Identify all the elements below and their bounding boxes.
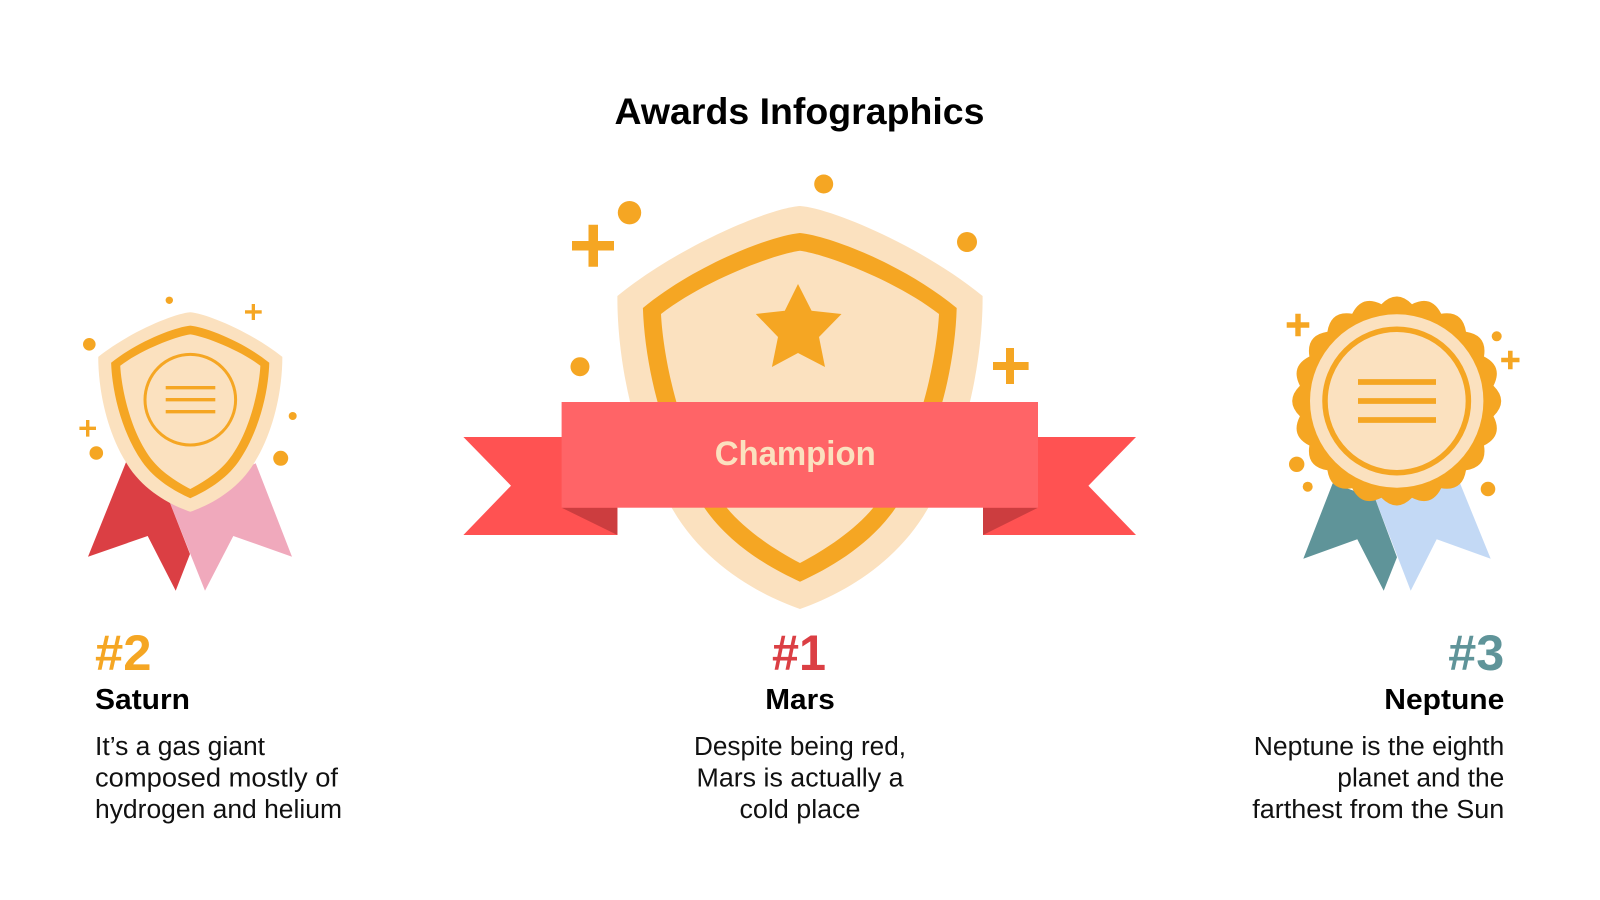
panel: saturn medal: [79, 297, 297, 591]
shield border: [643, 233, 957, 582]
text block: mars: [694, 625, 906, 824]
emblem lines: [166, 388, 215, 412]
description: [95, 733, 342, 824]
text block: saturn: [95, 625, 342, 824]
sparkles: [1287, 314, 1520, 496]
description: hydrogen and helium: [95, 796, 342, 824]
description: It’s a gas giant: [95, 733, 265, 761]
ribbon: light blue: [1375, 483, 1491, 591]
description: Despite being red,: [694, 733, 906, 761]
sparkles: [79, 297, 297, 466]
title: Awards Infographics: [614, 91, 984, 132]
banner centre: [562, 402, 1038, 508]
name: Saturn: [95, 684, 190, 716]
text block: neptune: [1252, 625, 1504, 824]
banner label: Champion: [715, 435, 876, 473]
rosette scalloped edge: [1292, 296, 1501, 506]
banner right fold: [983, 508, 1038, 535]
banner left tail: [463, 437, 617, 535]
description: composed mostly of: [95, 765, 339, 793]
description: Mars is actually a: [696, 765, 904, 793]
icon: star: [756, 284, 842, 367]
name: Neptune: [1384, 684, 1504, 716]
banner left fold: [562, 508, 617, 535]
panel: mars shield with banner: [463, 174, 1136, 609]
sparkles: [570, 174, 1029, 384]
emblem ring: [145, 354, 236, 445]
rosette cream disc: [1310, 314, 1483, 488]
banner right tail: [983, 437, 1136, 535]
shield fill: [617, 206, 983, 609]
name: Mars: [765, 684, 835, 716]
shield outer: [98, 312, 282, 512]
rosette ring: [1325, 329, 1468, 473]
description: cold place: [740, 796, 860, 824]
rank: #2: [95, 625, 152, 681]
ribbon: red: [88, 462, 190, 591]
shield border: [111, 326, 269, 498]
description: farthest from the Sun: [1252, 796, 1504, 824]
rank: #3: [1448, 625, 1504, 681]
description: [694, 733, 906, 824]
rank: #1: [772, 625, 826, 681]
ribbon: pink: [170, 463, 292, 591]
description: Neptune is the eighth: [1254, 733, 1504, 761]
description: planet and the: [1337, 765, 1504, 793]
panel: neptune rosette: [1287, 296, 1520, 591]
emblem lines: [1358, 382, 1436, 420]
ribbon: teal: [1303, 483, 1397, 591]
description: [1252, 733, 1504, 824]
